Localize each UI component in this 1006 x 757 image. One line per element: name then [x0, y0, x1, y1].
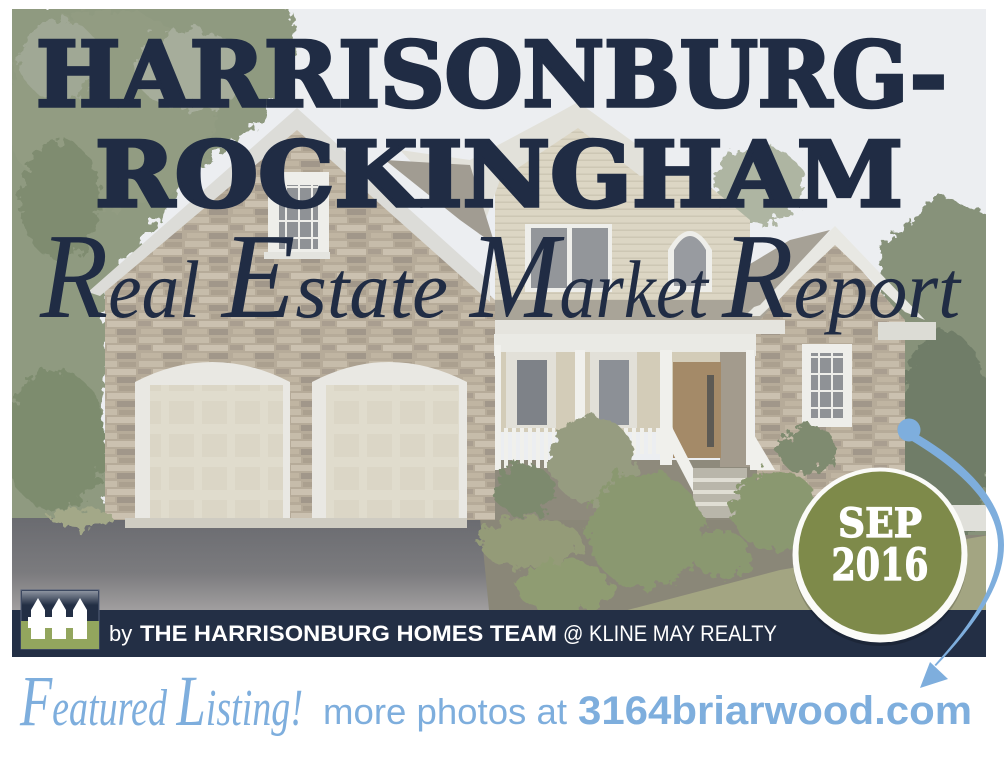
badge: Sep 2016: SEP: [838, 500, 922, 547]
caption: Featured Listing: Featured Listing!: [19, 661, 303, 741]
subtitle: Real Estate Market Report: Estate: [220, 209, 448, 344]
subtitle: Real Estate Market Report: Real: [39, 209, 200, 344]
title: Harrisonburg-Rockingham: HARRISONBURG-: [36, 22, 947, 128]
white picket fence: [952, 505, 986, 531]
upper window: [268, 172, 329, 258]
footer bar: [12, 610, 986, 657]
icon: picket fence logo: [21, 590, 99, 649]
house: right wing with gable: [744, 226, 936, 498]
subtitle: Real Estate Market Report: Market: [468, 209, 710, 344]
title: Harrisonburg-Rockingham: [36, 22, 947, 228]
driveway: [12, 518, 489, 610]
caption: more photos at: more photos at: [323, 691, 567, 732]
subtitle: Real Estate Market Report: [39, 209, 962, 344]
title: Harrisonburg-Rockingham: ROCKINGHAM: [95, 122, 903, 228]
footer bar: THE HARRISONBURG HOMES TEAM: [140, 621, 557, 646]
subtitle: Real Estate Market Report: Report: [721, 209, 962, 344]
arrow: points from house to listing URL: [898, 418, 1004, 688]
house: porch: [494, 320, 785, 520]
steps: [693, 468, 747, 518]
garage door left: [135, 362, 290, 520]
shrubs: [50, 416, 838, 614]
badge: Sep 2016: [792, 468, 968, 646]
credit text: by: [109, 621, 132, 646]
house: left wing with gable and garages: [88, 108, 495, 528]
front door: [673, 362, 721, 458]
garage door right: [312, 362, 467, 520]
house: central two-storey section: [385, 102, 775, 330]
footer bar: @ KLINE MAY REALTY: [563, 621, 777, 646]
railings: [504, 428, 555, 468]
lawn: ground right: [480, 520, 986, 610]
badge: Sep 2016: 2016: [832, 540, 928, 591]
caption: listing URL: 3164briarwood.com: [578, 689, 972, 733]
trees: background foliage: [3, 4, 993, 560]
